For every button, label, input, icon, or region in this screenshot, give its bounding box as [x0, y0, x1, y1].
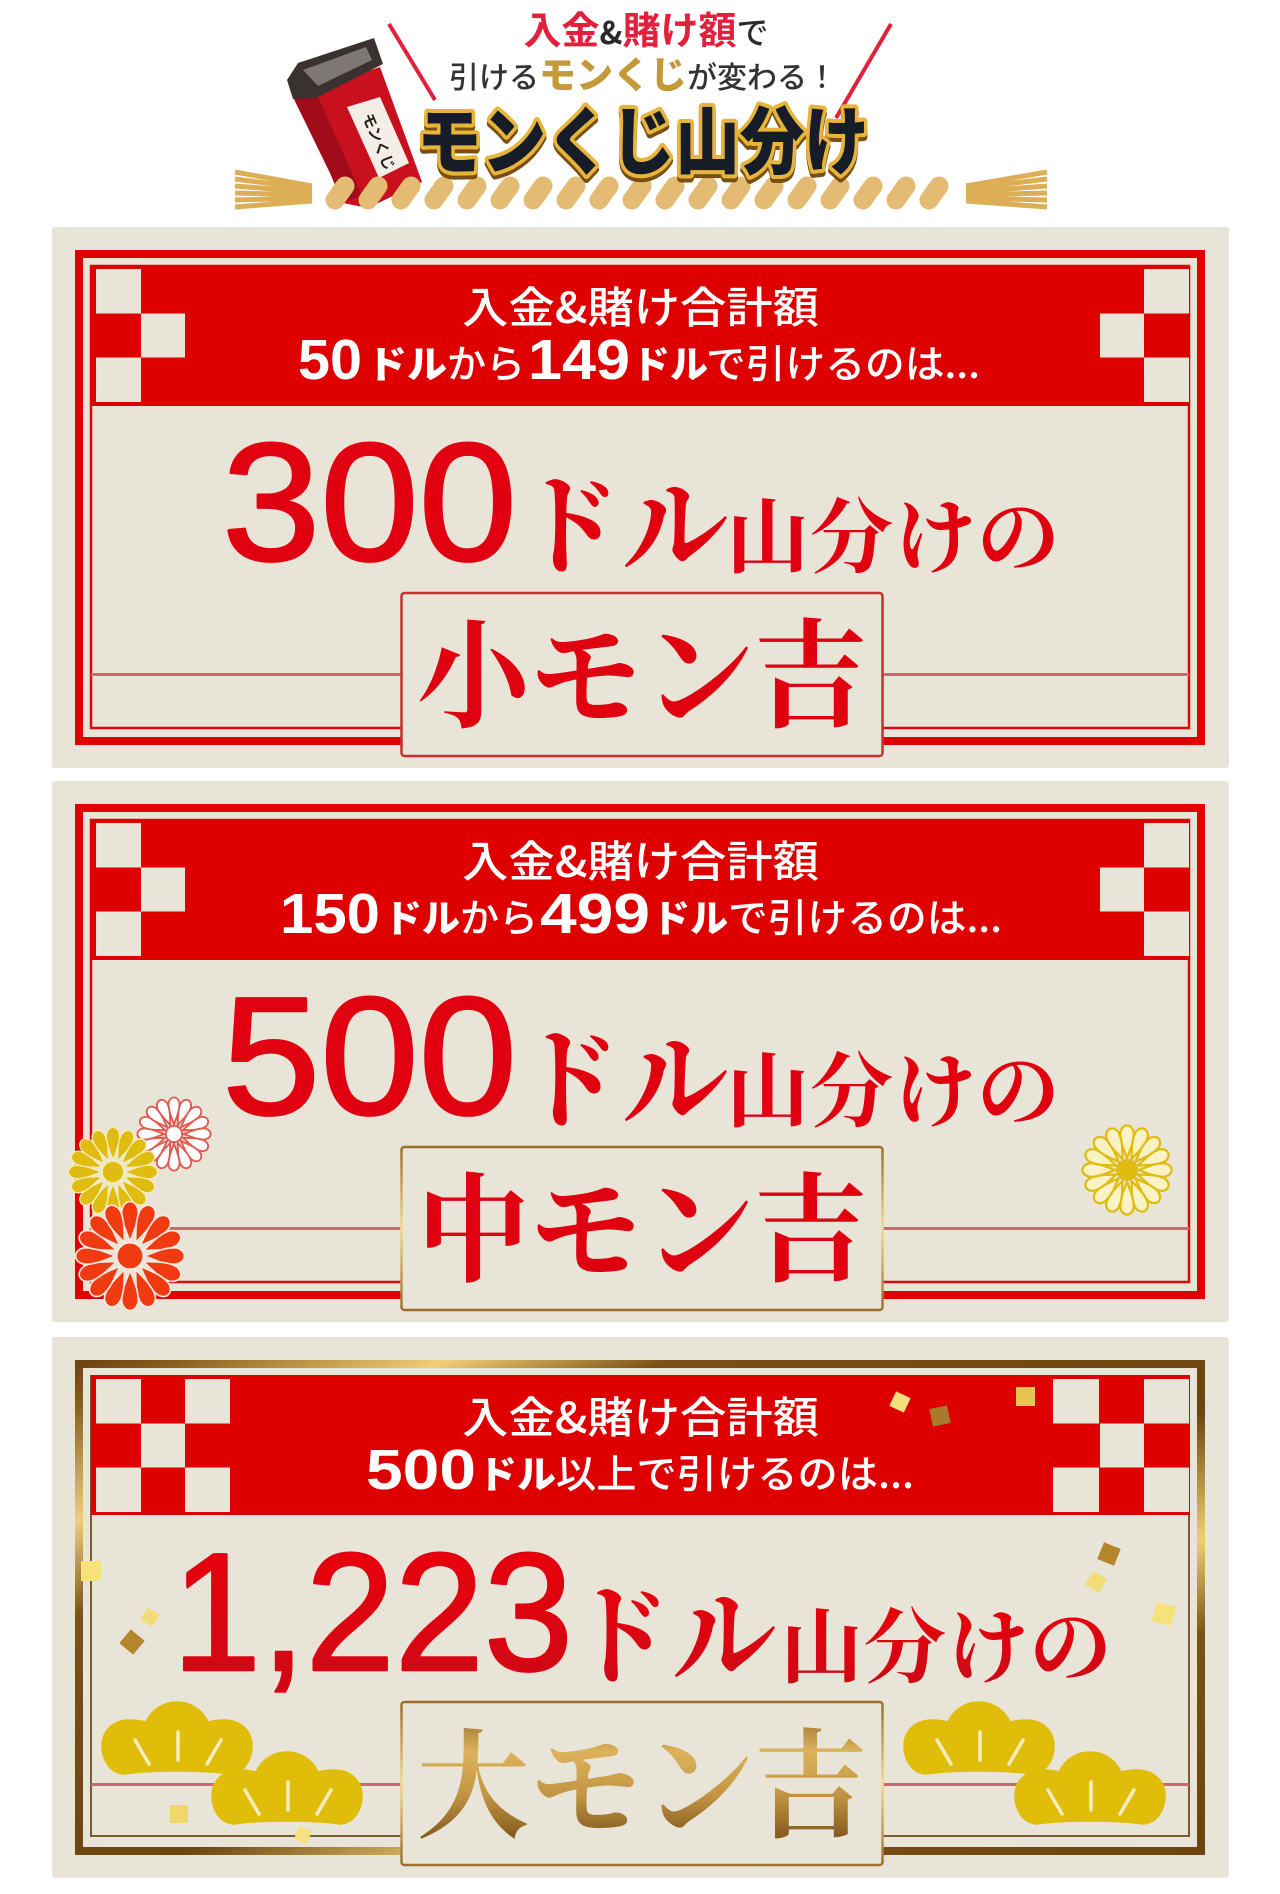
icon: kuji box: [287, 38, 422, 208]
prize amount: ドル: [516, 440, 728, 598]
confetti: [81, 1387, 1176, 1844]
header text line 2: 149: [528, 328, 630, 392]
inner frame: [91, 266, 1189, 728]
outer frame: [79, 254, 1201, 741]
headline line 2: 引けるモンくじが変わる！: [449, 45, 837, 99]
icon: yellow chrysanthemum: [68, 1127, 158, 1217]
prize name box: 小モン吉: [417, 582, 867, 752]
icon: white chrysanthemum: [137, 1097, 211, 1171]
panel background: [52, 227, 1229, 768]
prize name box: 中モン吉: [417, 1136, 867, 1306]
checker left: [96, 1379, 230, 1512]
checker right: [1053, 1379, 1189, 1512]
header band: [91, 1375, 1190, 1515]
prize amount: [222, 962, 1060, 1152]
icon: pine left: [102, 1702, 362, 1824]
panel 3: big monkichi: [52, 1337, 1229, 1878]
ribbon line: [91, 1783, 1189, 1786]
prize amount: [222, 408, 1060, 598]
header text line 2: 499: [540, 882, 650, 946]
header text line 2: から: [447, 334, 525, 390]
prize amount: [172, 1518, 1112, 1708]
icon: kuji box: モンくじ: [357, 110, 400, 173]
checker right: [1100, 269, 1189, 402]
title: モンくじ山分け: [417, 83, 869, 190]
checker right: [1100, 823, 1189, 956]
header text line 2: 500: [366, 1438, 476, 1502]
header text line 2: [298, 328, 980, 392]
header text line 2: 150: [280, 882, 380, 946]
header text line 2: から: [460, 888, 538, 944]
header: monkuji yamawake title: [235, 0, 1047, 208]
panel background: [52, 781, 1229, 1322]
red accent lines: [389, 24, 891, 118]
header text line 2: ドル: [652, 888, 728, 943]
header text line 1: 入金&賭け合計額: [462, 1384, 819, 1446]
icon: outlined yellow chrysanthemum: [1082, 1125, 1172, 1215]
prize amount: 300: [222, 408, 517, 596]
prize amount: 山分けの: [726, 1027, 1060, 1144]
prize amount: 500: [222, 962, 517, 1150]
header text line 2: [366, 1438, 914, 1502]
prize amount: 1,223: [172, 1518, 573, 1706]
prize name box: 大モン吉: [417, 1692, 867, 1862]
header text line 2: で引けるのは...: [706, 334, 980, 390]
header text line 2: 以上で引けるのは...: [556, 1444, 914, 1500]
header text line 2: ドル: [478, 1444, 556, 1499]
prize amount: ドル: [516, 994, 728, 1152]
headline line 1: 入金&賭け額で: [524, 0, 768, 55]
header text line 1: 入金&賭け合計額: [462, 828, 819, 890]
panel 2: medium monkichi: [52, 781, 1229, 1322]
panel 1: small monkichi: [52, 227, 1229, 768]
icon: pine right: [904, 1702, 1165, 1824]
icon: orange chrysanthemum: [76, 1202, 184, 1310]
header text line 2: 50: [298, 328, 362, 392]
tassel right: [966, 172, 1047, 207]
rope: [335, 186, 939, 200]
header band: [91, 819, 1190, 960]
prize amount: 山分けの: [726, 473, 1060, 590]
prize amount: ドル: [568, 1550, 776, 1708]
header text line 2: ドル: [367, 334, 447, 389]
ribbon line: [91, 1227, 1189, 1230]
inner frame: [91, 1376, 1189, 1836]
panel background: [52, 1337, 1229, 1878]
checker left: [96, 269, 185, 402]
header band: [91, 265, 1190, 406]
ribbon line: [91, 673, 1189, 676]
header text line 2: ドル: [384, 888, 460, 943]
tassel left: [235, 172, 312, 207]
header text line 2: で引けるのは...: [728, 888, 1002, 944]
header text line 1: 入金&賭け合計額: [462, 274, 819, 336]
outer frame: [79, 808, 1201, 1295]
checker left: [96, 823, 185, 956]
header text line 2: ドル: [632, 334, 708, 389]
prize amount: 山分けの: [780, 1583, 1112, 1700]
header text line 2: [280, 882, 1002, 946]
outer gold frame: [79, 1364, 1201, 1851]
inner frame: [91, 820, 1189, 1282]
